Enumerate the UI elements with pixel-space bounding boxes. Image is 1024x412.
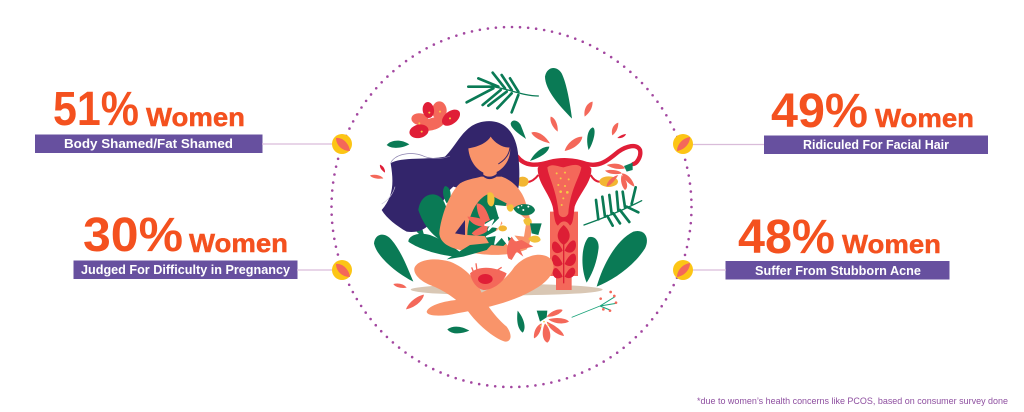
- connector: 49%: [691, 144, 764, 146]
- stat: 49% Women: Ridiculed For Facial Hair: [803, 138, 949, 152]
- icon: petal badge: [673, 260, 693, 280]
- petals: [370, 102, 618, 309]
- womb flower on lap: [470, 263, 507, 290]
- red flower top left: [408, 101, 463, 140]
- stat: 30% Women: Judged For Difficulty in Pregnancy: [81, 263, 290, 277]
- stat: 49% Women: 49%: [771, 85, 868, 138]
- stat: 48% Women: 48%: [738, 211, 835, 264]
- fern top: [467, 73, 538, 112]
- stat: 51% Women: [35, 83, 262, 153]
- stat: 30% Women: 30%: [83, 209, 183, 262]
- crossed legs: [414, 259, 511, 342]
- uterus: [517, 146, 640, 290]
- leaves: [374, 68, 647, 333]
- small back leaf at shoulder: [443, 186, 451, 203]
- stat: 30% Women: [74, 209, 298, 279]
- icon: petal badge: [332, 260, 352, 280]
- bouquet: [447, 192, 542, 260]
- footnote: *due to women’s health concerns like PCOS, based on consumer survey done: [697, 396, 1008, 407]
- ground shadow: [411, 284, 603, 295]
- connector: 30%: [297, 269, 334, 271]
- back leaves behind woman: [408, 234, 462, 257]
- stat: 51% Women: Body Shamed/Fat Shamed: [64, 137, 233, 151]
- stat: 48% Women: Women: [842, 229, 941, 259]
- woman: [414, 137, 553, 342]
- connector: 51%: [262, 143, 334, 145]
- fern right: [584, 187, 642, 226]
- hair: [382, 121, 519, 232]
- icon: petal badge: [673, 134, 693, 154]
- stat: 51% Women: 51%: [53, 83, 139, 136]
- stat: 49% Women: [764, 85, 988, 154]
- connector: 48%: [691, 269, 726, 271]
- stat: 49% Women: Women: [875, 103, 974, 133]
- icon: petal badge: [332, 134, 352, 154]
- large back leaf over hair: [418, 194, 449, 243]
- stat: 48% Women: Suffer From Stubborn Acne: [755, 264, 921, 278]
- illustration: woman with flowers and uterus: [370, 68, 647, 343]
- stat: 30% Women: Women: [189, 228, 288, 258]
- stat: 48% Women: [726, 211, 950, 280]
- stat: 51% Women: Women: [146, 102, 245, 132]
- bottom flower: [534, 291, 617, 343]
